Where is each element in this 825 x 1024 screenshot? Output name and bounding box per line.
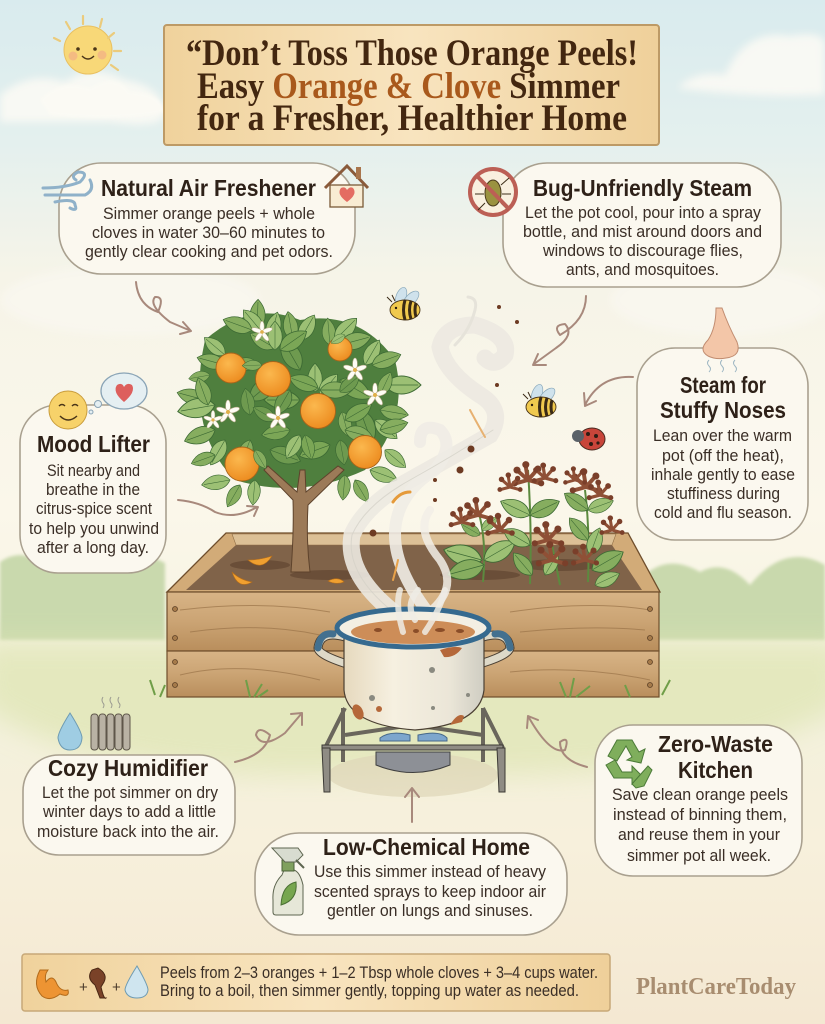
title banner: for a Fresher, Healthier Home	[197, 98, 627, 139]
panel: zero-waste kitchen: simmer pot all week.	[627, 846, 771, 865]
arrow: humidifier	[235, 713, 302, 762]
icon: smiley	[49, 391, 87, 429]
panel: steam for stuffy noses: cold and flu season.	[654, 503, 792, 522]
icon: house with heart	[325, 166, 368, 207]
icon: clove	[90, 968, 106, 998]
panel: bug-unfriendly steam	[470, 163, 781, 287]
panel: cozy humidifier: moisture back into the air.	[37, 822, 219, 841]
panel: zero-waste kitchen	[595, 725, 802, 876]
panel: mood lifter: Sit nearby and	[47, 461, 140, 480]
plus: +	[79, 979, 88, 996]
panel: low-chemical home	[255, 833, 567, 935]
arrow: zero waste	[527, 716, 587, 767]
panel: cozy humidifier	[23, 697, 235, 855]
icon: no bugs	[470, 169, 516, 215]
recipe strip: Peels from 2–3 oranges + 1–2 Tbsp whole cloves + 3–4 cups water.	[160, 963, 598, 982]
panel: bug-unfriendly steam: ants, and mosquitoes.	[566, 260, 719, 279]
bee right	[523, 383, 558, 417]
panel: natural air freshener: cloves in water 30–60 minutes to	[92, 223, 325, 242]
panel: natural air freshener	[43, 163, 368, 274]
logo: PlantCareToday	[636, 974, 796, 1000]
icon: water drop	[58, 713, 82, 750]
panel: steam for stuffy noses	[637, 308, 808, 540]
panel: zero-waste kitchen: Save clean orange peels	[612, 785, 788, 804]
ladybug	[572, 428, 605, 450]
panel: natural air freshener: Simmer orange peels + whole	[103, 204, 315, 223]
panel: mood lifter: breathe in the	[46, 480, 140, 499]
pot body	[344, 630, 484, 730]
panel: cozy humidifier: winter days to add a little	[42, 802, 216, 821]
blossoms	[203, 321, 387, 429]
panel: natural air freshener: gently clear cooking and pet odors.	[85, 242, 333, 261]
title banner: Easy Orange & Clove Simmer	[197, 66, 620, 107]
panel: mood lifter: Mood Lifter	[37, 431, 150, 457]
arrow: low chemical	[405, 788, 419, 822]
trunk	[264, 466, 344, 572]
panel: mood lifter	[20, 373, 166, 573]
icon: nose	[703, 308, 738, 372]
background clouds	[0, 34, 825, 336]
panel: low-chemical home: gentler on lungs and sinuses.	[327, 901, 533, 920]
panel: steam for stuffy noses: Stuffy Noses	[660, 397, 786, 423]
leaves	[175, 299, 421, 510]
arrow: bug steam	[533, 296, 586, 365]
orange tree	[175, 299, 421, 572]
leaves over oranges	[242, 331, 347, 471]
bee top	[387, 286, 422, 320]
handles	[318, 634, 510, 665]
title banner	[164, 25, 659, 145]
panel: mood lifter: citrus-spice scent	[36, 499, 152, 518]
panel: steam for stuffy noses: pot (off the heat),	[662, 446, 784, 465]
recipe strip	[22, 954, 610, 1011]
panel: bug-unfriendly steam: Let the pot cool, pour into a spray	[525, 203, 761, 222]
panel: bug-unfriendly steam: Bug-Unfriendly Steam	[533, 175, 752, 201]
icon: sun	[54, 16, 121, 74]
steam swirls	[351, 297, 519, 615]
icon: water droplet	[125, 966, 148, 998]
icon: wind	[43, 172, 92, 209]
icon: recycle	[606, 740, 652, 788]
panel: low-chemical home: Low-Chemical Home	[323, 834, 530, 860]
panel: steam for stuffy noses: Lean over the warm	[653, 426, 792, 445]
panel: cozy humidifier: Cozy Humidifier	[48, 755, 208, 781]
panel: steam for stuffy noses: inhale gently to ease	[651, 465, 795, 484]
arrow: mood	[178, 500, 258, 516]
background bushes	[0, 554, 825, 640]
panel: steam for stuffy noses: stuffiness during	[667, 484, 780, 503]
arrow: stuffy noses	[584, 377, 633, 406]
plus 2: +	[112, 979, 121, 996]
grass ground	[0, 640, 825, 775]
panel: bug-unfriendly steam: windows to discourage flies,	[542, 241, 743, 260]
title banner: “Don’t Toss Those Orange Peels!	[186, 33, 638, 74]
panel: low-chemical home: scented sprays to keep indoor air	[314, 882, 546, 901]
panel: zero-waste kitchen: instead of binning them,	[613, 805, 787, 824]
oranges	[216, 337, 382, 481]
panel: cozy humidifier: Let the pot simmer on dry	[42, 783, 218, 802]
panel: bug-unfriendly steam: bottle, and mist around doors and	[523, 222, 762, 241]
cloud under sun	[40, 81, 165, 118]
pot rim	[337, 609, 489, 647]
icon: radiator	[91, 697, 130, 750]
panel: mood lifter: after a long day.	[37, 538, 149, 557]
clove plants	[441, 461, 628, 591]
icon: orange peel	[36, 970, 68, 999]
cooking pot	[318, 609, 510, 797]
panel: low-chemical home: Use this simmer instead of heavy	[314, 862, 546, 881]
panel: mood lifter: to help you unwind	[29, 519, 159, 538]
panel: zero-waste kitchen: Zero-Waste	[658, 731, 773, 757]
panel: zero-waste kitchen: Kitchen	[678, 757, 753, 783]
arrow: air freshener	[136, 282, 191, 334]
burner stand	[322, 708, 505, 797]
icon: spray bottle	[272, 848, 304, 915]
panel: steam for stuffy noses: Steam for	[680, 372, 766, 398]
panel: zero-waste kitchen: and reuse them in your	[618, 825, 780, 844]
steam over pot	[398, 590, 445, 632]
recipe strip: Bring to a boil, then simmer gently, topping up water as needed.	[160, 981, 579, 1000]
panel: natural air freshener: Natural Air Freshener	[101, 175, 316, 201]
raised garden bed	[150, 533, 670, 697]
tree canopy shadow	[199, 313, 399, 488]
icon: thought bubble with heart	[89, 373, 147, 414]
